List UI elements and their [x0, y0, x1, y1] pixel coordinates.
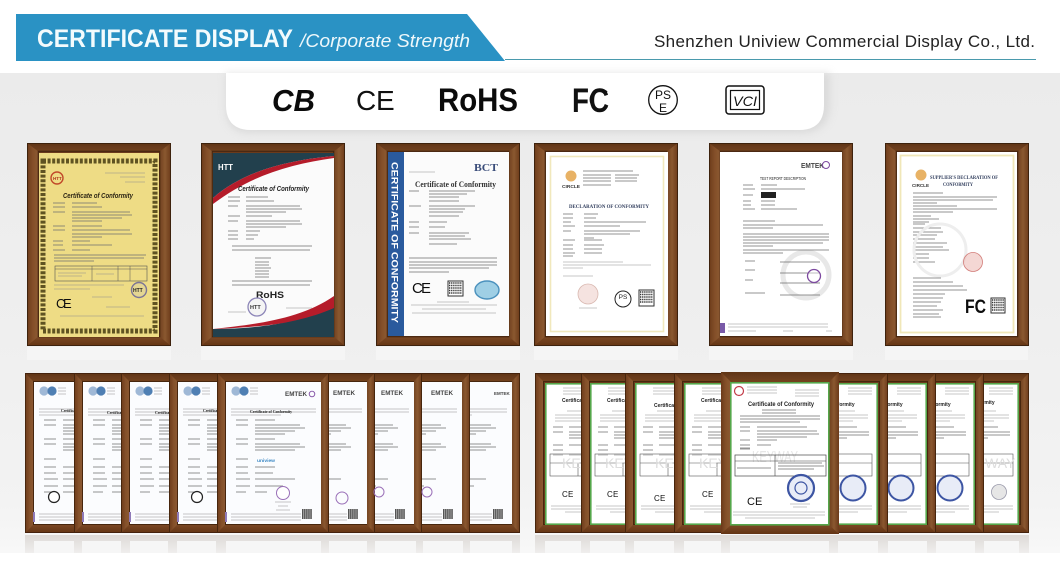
stack: back certificates right side: Certificate of Conformity [892, 402, 951, 408]
panel: certification logos [226, 73, 830, 133]
front certificate: Keyway CE conformity: Certificate of Conformity [748, 401, 814, 408]
FC mark: FC [965, 297, 986, 318]
front certificate: EMTEK conformity [217, 373, 329, 533]
front certificate: Keyway CE conformity [721, 372, 839, 534]
heading: Certificate of Conformity [63, 191, 134, 200]
stack: back certificates right side: WAY [985, 455, 1016, 471]
Circle logo: CIRCLE [562, 184, 580, 189]
front certificate: Keyway CE conformity: CE [747, 496, 762, 508]
Circle logo: CIRCLE [912, 183, 929, 188]
header banner [16, 14, 505, 61]
stack: back certificates right side [263, 373, 520, 533]
heading [930, 176, 998, 188]
stack: back certificates left side: Certificate of Conformity [607, 398, 666, 404]
certificate: EMTEK test report [709, 143, 853, 346]
certificate: BCT blue side bar: CE [412, 280, 431, 297]
logo: PSE [649, 86, 677, 115]
QR code [448, 281, 463, 296]
stack: back certificates right side: Certificate of Conformity [796, 402, 855, 408]
reflection: bottom left certificates [25, 535, 520, 553]
logo: CE: CE [356, 85, 395, 116]
front certificate: EMTEK conformity: EMTEK [285, 391, 307, 398]
header rule [505, 59, 1036, 60]
certificate: HTT RoHS [201, 143, 345, 346]
certificate: HTT RoHS: HTT [250, 305, 261, 311]
stack: back certificates right side: EMTEK [333, 390, 355, 397]
reflection: top row [27, 347, 1028, 360]
stack: back certificates left side: CE [654, 494, 665, 503]
stack: back certificates left side: KEY [562, 455, 591, 471]
certificate: Circle supplier's declaration [885, 143, 1029, 346]
logo: FC: FC [572, 82, 609, 120]
side bar text: CERTIFICATE OF CONFORMITY [390, 162, 400, 323]
heading: DECLARATION OF CONFORMITY [569, 204, 649, 210]
stack: back certificates right side: EMTEK [381, 390, 403, 397]
heading: Certificate of Conformity [238, 184, 310, 193]
front certificate: EMTEK conformity: Certificate of Conformity [250, 409, 293, 414]
certificate: gold HTT CE [27, 143, 171, 346]
stack: back certificates left side: Certificate of Conformity [203, 409, 244, 413]
certificate: gold HTT CE: HTT [133, 288, 143, 294]
stack: back certificates left side: Certificate of Conformity [155, 411, 196, 415]
EMTEK logo: EMTEK [801, 161, 825, 170]
certificate: BCT blue side bar [376, 143, 520, 346]
HTT logo: HTT [218, 163, 233, 172]
reflection: bottom right certificates [535, 535, 1029, 553]
stack: back certificates right side: Certificate of Conformity [844, 402, 903, 408]
heading: Certificate of Conformity [415, 180, 496, 189]
stack: back certificates left side: CE [562, 490, 573, 499]
certificate: gold HTT CE: HTT [53, 176, 62, 181]
logo: PSE: E [659, 101, 667, 115]
stack: back certificates left side [535, 373, 786, 533]
heading: SUPPLIER'S DECLARATION OF [930, 176, 998, 181]
PSE mark: PS [619, 294, 628, 301]
certificate stack: left group [25, 373, 520, 533]
logo: VCCI: VCI [733, 93, 757, 109]
company name: Shenzhen Uniview Commercial Display Co., Ltd. [654, 32, 1035, 51]
logo: PSE: PS [655, 88, 671, 102]
RoHS mark: RoHS [256, 290, 284, 301]
stack: back certificates left side: Certificate of Conformity [654, 403, 713, 409]
stack: back certificates left side: Certificate of Conformity [562, 398, 621, 404]
stack: back certificates left side: KEY [655, 455, 684, 471]
heading: CONFORMITY [943, 183, 973, 188]
stack: back certificates right side: Certificate of Conformity [936, 400, 995, 406]
stack: back certificates left side: Certificate of Conformity [107, 411, 148, 415]
banner subtitle: /Corporate Strength [298, 30, 470, 51]
certificate stack: right group [535, 372, 1029, 534]
CE mark: CE [56, 296, 72, 311]
stack: back certificates right side: EMTEK [494, 391, 511, 396]
banner title: CERTIFICATE DISPLAY [37, 25, 293, 53]
stack: back certificates right side [776, 373, 1029, 533]
front certificate: EMTEK conformity: uniview [257, 458, 276, 463]
stack: back certificates left side: Certificate of Conformity [701, 398, 760, 404]
front certificate: Keyway CE conformity: KEYWAY [752, 449, 798, 466]
stack: back certificates left side: Certificate of Conformity [61, 409, 102, 413]
stack: back certificates left side [25, 373, 281, 533]
logo: RoHS: RoHS [438, 82, 518, 118]
stack: back certificates left side: KEY [699, 455, 728, 471]
PSE marks on stacked certificates [48, 492, 202, 502]
logo: CB: CB [272, 83, 315, 118]
stack: back certificates left side: CE [702, 490, 713, 499]
stack: back certificates left side: CE [607, 490, 618, 499]
logo: VCCI [726, 86, 764, 114]
BCT logo: BCT [474, 162, 499, 174]
stack: back certificates left side: KEY [605, 455, 634, 471]
heading: TEST REPORT DESCRIPTION [760, 176, 806, 181]
certificate: Circle declaration of conformity [534, 143, 678, 346]
stack: back certificates right side: EMTEK [431, 390, 453, 397]
